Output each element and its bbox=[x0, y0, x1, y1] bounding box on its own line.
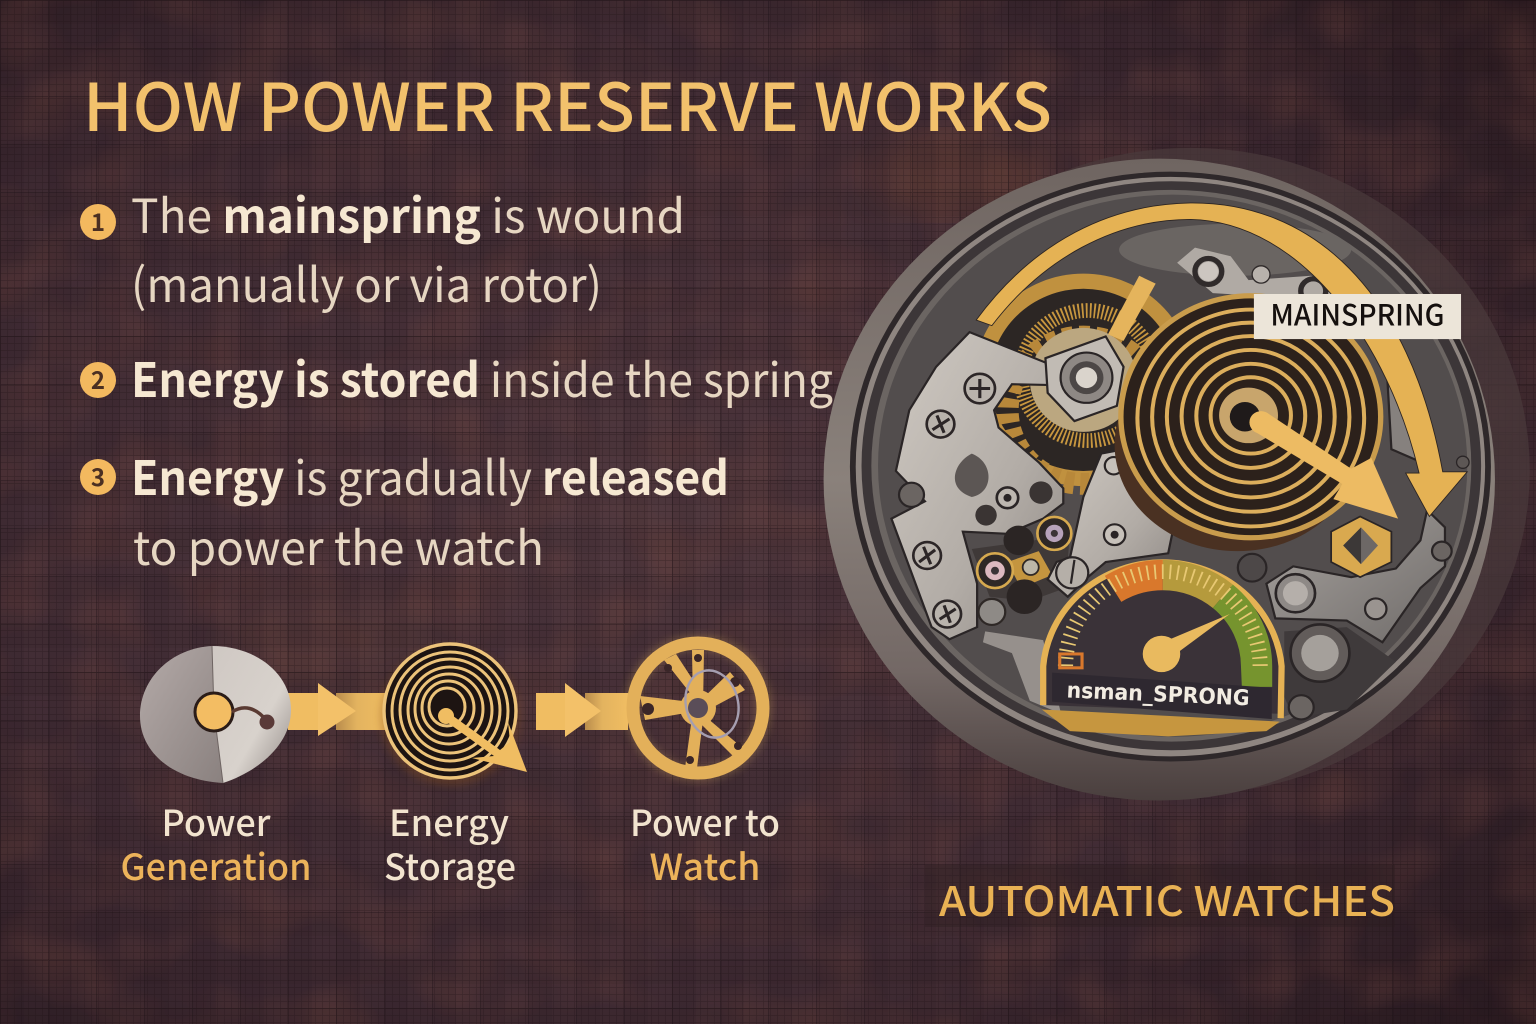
movement plate bbox=[878, 195, 1467, 737]
mainspring label: MAINSPRING bbox=[1270, 291, 1445, 335]
lower right bridge bbox=[899, 371, 1469, 719]
arrow: generation to storage bbox=[288, 683, 388, 736]
label: power generation: Power bbox=[162, 795, 271, 847]
label: power to watch: Watch bbox=[650, 839, 760, 891]
arrow: storage to watch bbox=[536, 683, 628, 737]
label: power generation: Generation bbox=[120, 839, 312, 891]
screws bbox=[913, 374, 995, 628]
hub pointer arrow bbox=[1249, 411, 1398, 519]
label: energy storage: Storage bbox=[384, 839, 516, 891]
label: power generation bbox=[120, 795, 312, 891]
center steel bridge bbox=[1048, 449, 1173, 597]
green segment bbox=[1213, 585, 1272, 687]
step 2 bbox=[80, 342, 833, 411]
label: power to watch bbox=[630, 795, 780, 891]
step 3 bbox=[80, 440, 729, 579]
hex screw bbox=[1331, 516, 1391, 577]
step 1 text: The mainspring is wound bbox=[131, 178, 685, 247]
label: energy storage bbox=[384, 795, 516, 891]
title: HOW POWER RESERVE WORKS bbox=[83, 55, 1052, 151]
step 1 text: (manually or via rotor) bbox=[131, 247, 602, 316]
outer case ring bbox=[824, 159, 1495, 801]
gauge banner bbox=[1052, 673, 1272, 719]
step 1 text bbox=[131, 178, 685, 316]
badge 3: 3 bbox=[91, 458, 105, 493]
step 3 text: Energy is gradually released bbox=[131, 440, 729, 509]
caption band bbox=[925, 865, 1395, 927]
hub bridge bbox=[1045, 336, 1124, 421]
label: power to watch: Power to bbox=[630, 795, 780, 847]
mainspring bbox=[1115, 293, 1398, 551]
badge 2 bbox=[80, 361, 116, 398]
step 3 text bbox=[131, 440, 729, 579]
watch illustration bbox=[824, 148, 1530, 801]
gauge ticks bbox=[1066, 572, 1260, 666]
step 1 bbox=[80, 178, 685, 316]
top right detail bbox=[1177, 248, 1347, 297]
caption: automatic watches: AUTOMATIC WATCHES bbox=[939, 868, 1395, 928]
badge 1 bbox=[80, 203, 116, 240]
yellow segment bbox=[1163, 560, 1233, 608]
balance wheel bbox=[974, 274, 1193, 486]
label: energy storage: Energy bbox=[389, 795, 509, 847]
icon: spring bbox=[380, 643, 527, 786]
badge 3 bbox=[80, 458, 116, 495]
icon: rotor disc bbox=[140, 646, 291, 783]
case shadow disc bbox=[851, 148, 1530, 794]
badge 2: 2 bbox=[91, 361, 105, 396]
icon: gear wheel bbox=[632, 642, 764, 774]
badge 1: 1 bbox=[91, 203, 105, 238]
step 2 text: Energy is stored inside the spring bbox=[131, 342, 833, 411]
needle bbox=[1143, 614, 1230, 672]
left steel bridge bbox=[891, 332, 1063, 639]
power reserve gauge bbox=[1042, 560, 1282, 736]
orange segment bbox=[1105, 560, 1163, 602]
step 3 text: to power the watch bbox=[133, 510, 544, 579]
lower gears and jewels bbox=[972, 517, 1071, 714]
power reserve gauge: nsman_SPRONG bbox=[1066, 679, 1250, 711]
gold sweep arrow bbox=[976, 203, 1467, 516]
